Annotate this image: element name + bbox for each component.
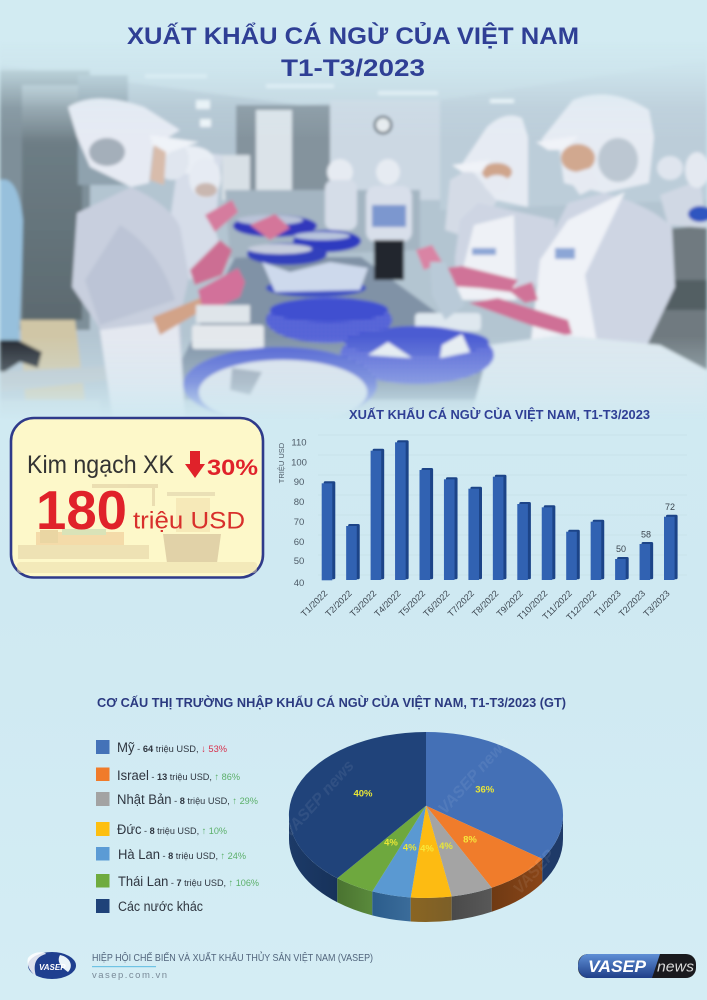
y axis labels: 70 (294, 517, 304, 528)
y axis labels: 50 (294, 556, 304, 567)
heading: bar chart title: XUẤT KHẨU CÁ NGỪ CỦA VIỆT NAM, T1-T3/2023 (349, 407, 650, 422)
x axis labels: T1/2023 (592, 588, 623, 619)
data labels (616, 502, 675, 554)
percentage labels: 4% (420, 844, 434, 854)
logo: VASEP globe: VASEP (39, 963, 66, 972)
y axis labels: 90 (294, 477, 304, 488)
organisation name: HIỆP HỘI CHẾ BIẾN VÀ XUẤT KHẨU THỦY SẢN VIỆT NAM (VASEP) (92, 951, 373, 964)
x axis labels: T8/2022 (470, 588, 501, 619)
bar chart: monthly tuna exports (277, 435, 687, 622)
footer (27, 951, 696, 981)
logo: VASEP news badge: news (657, 958, 695, 976)
x axis labels: T4/2022 (372, 588, 403, 619)
legend: import markets (96, 740, 260, 914)
watermarks on pie (280, 734, 559, 898)
legend: Đức: Đức - 8 triệu USD, ↑ 10% (117, 822, 228, 837)
y axis labels: 110 (291, 438, 307, 448)
text: triệu USD: triệu USD (133, 508, 245, 534)
percentage labels (353, 784, 495, 854)
logo: VASEP globe (27, 952, 76, 979)
percentage labels: 8% (463, 834, 477, 846)
y axis labels: 60 (294, 537, 304, 548)
x axis labels: T12/2022 (564, 588, 598, 622)
x axis labels: T1/2022 (299, 588, 329, 619)
y axis title: TRIỆU USD (277, 442, 286, 483)
x axis labels: T3/2023 (641, 588, 672, 619)
y axis labels (291, 438, 307, 589)
watermarks on pie: VASEP news (280, 757, 358, 841)
legend: Hà Lan: Hà Lan - 8 triệu USD, ↑ 24% (118, 847, 247, 862)
x axis labels: T11/2022 (540, 588, 574, 622)
watermarks on pie: VASEP news (435, 734, 513, 818)
bars (322, 440, 678, 580)
percentage labels: 4% (384, 838, 398, 848)
photo: tuna processing workers (0, 40, 707, 424)
slice: Đức 4% (411, 806, 452, 898)
legend: Nhật Bản: Nhật Bản - 8 triệu USD, ↑ 29% (117, 792, 259, 807)
percentage labels: 36% (475, 784, 495, 796)
percentage labels: 4% (439, 841, 453, 852)
x axis labels: T2/2022 (323, 588, 354, 619)
logo: VASEP news badge (578, 954, 696, 978)
x axis labels (299, 588, 672, 622)
x axis labels: T3/2022 (348, 588, 378, 619)
y axis labels: 40 (294, 578, 304, 589)
x axis labels: T9/2022 (495, 588, 525, 619)
panel: export value callout (11, 418, 263, 578)
pie side walls (289, 815, 563, 922)
slice: Israel 8% (426, 806, 542, 888)
title: XUẤT KHẨU CÁ NGỪ CỦA VIỆT NAM (127, 21, 579, 50)
legend: Thái Lan: Thái Lan - 7 triệu USD, ↑ 106% (118, 874, 260, 889)
pie chart: market share (280, 732, 563, 922)
legend: Các nước khác: Các nước khác (118, 899, 203, 914)
title: T1-T3/2023 (281, 55, 425, 82)
x axis labels: T10/2022 (515, 588, 549, 622)
slice: Thái Lan 4% (337, 806, 426, 891)
text: minus 30 percent: 30% (207, 455, 258, 480)
data labels: 58 (641, 530, 651, 540)
illustration: port and cargo ship (17, 484, 257, 573)
percentage labels: 40% (353, 788, 373, 800)
legend: Mỹ: Mỹ - 64 triệu USD, ↓ 53% (117, 740, 228, 755)
slice: Hà Lan 4% (372, 806, 426, 898)
website: vasep.com.vn (92, 970, 167, 981)
watermarks on pie: VASEP (510, 847, 559, 898)
slice: others 40% (289, 732, 426, 878)
data labels: 50 (616, 544, 626, 554)
text: Kim ngạch XK: Kim ngạch XK (27, 451, 174, 479)
slice: Mỹ 36% (426, 732, 563, 859)
logo: VASEP news badge: VASEP (588, 957, 647, 976)
x axis labels: T7/2022 (446, 588, 476, 619)
x axis labels: T6/2022 (421, 588, 452, 619)
legend: Israel: Israel - 13 triệu USD, ↑ 86% (117, 768, 241, 783)
icon: down arrow (185, 451, 205, 478)
heading: pie chart title: CƠ CẤU THỊ TRƯỜNG NHẬP KHẨU CÁ NGỪ CỦA VIỆT NAM, T1-T3/2023 (GT) (97, 695, 566, 710)
x axis labels: T5/2022 (397, 588, 427, 619)
y axis labels: 80 (294, 497, 304, 508)
text: 180: 180 (36, 479, 127, 541)
percentage labels: 4% (403, 842, 417, 854)
title (127, 21, 579, 82)
y axis labels: 100 (291, 458, 307, 468)
x axis labels: T2/2023 (617, 588, 647, 619)
data labels: 72 (665, 502, 675, 512)
slice: Nhật Bản 4% (426, 806, 492, 896)
